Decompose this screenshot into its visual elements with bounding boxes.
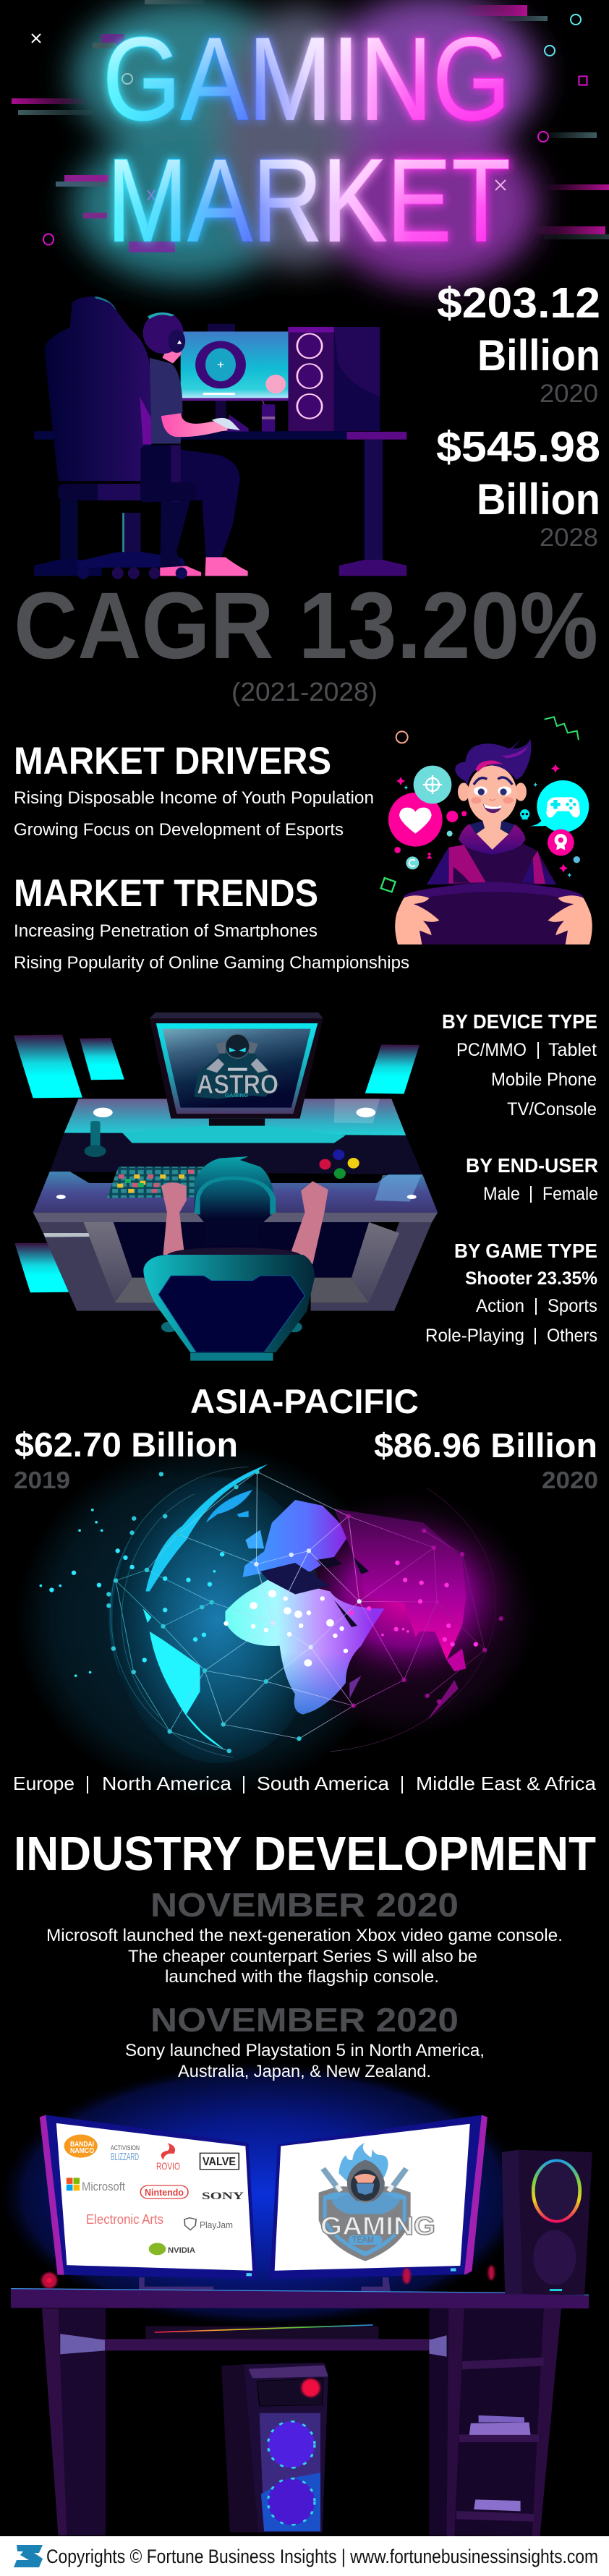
segment: end-user (466, 1154, 598, 1204)
coin icon (406, 856, 419, 869)
development: Sony (125, 2001, 485, 2081)
boy hair (455, 739, 531, 786)
Asia-Pacific 2019 value: 2019 (14, 1467, 70, 1493)
floating shapes (381, 717, 580, 892)
market size 2028 (436, 423, 600, 552)
decorative bars and shapes (12, 0, 609, 252)
illustration: dual monitor gaming desk (0, 2060, 592, 2536)
desk surface (33, 1099, 438, 1222)
segment: device type: PC/MMO (456, 1040, 527, 1060)
market size 2028: 2028 (540, 524, 598, 552)
bookshelf right (456, 2358, 544, 2522)
boy ears and face (458, 765, 527, 823)
boy neck and collar (459, 817, 526, 855)
network mesh (111, 1467, 496, 1757)
partner logo names: SONY (202, 2191, 244, 2202)
CAGR: (2021-2028) (231, 677, 378, 707)
title text: GAMING (103, 12, 511, 145)
segment: device type: Tablet (548, 1040, 597, 1060)
monitor (150, 1012, 323, 1126)
glowing city lights left (40, 1509, 224, 1677)
segment: end-user: Male (483, 1184, 520, 1204)
partner logos artwork (64, 2134, 239, 2255)
bubble: gamepad (529, 780, 589, 832)
under-desk shelf and RGB strip (60, 2325, 447, 2357)
Asia-Pacific 2019 value: $62.70 Billion (14, 1425, 238, 1464)
bubble: target (414, 766, 451, 803)
partner logo names (70, 2141, 244, 2255)
desk (34, 431, 406, 576)
segment: game type: Sports (548, 1296, 597, 1316)
network nodes (106, 1470, 302, 1753)
development: Sony: Australia, Japan, & New Zealand. (178, 2062, 431, 2081)
illustration: network globe (15, 1443, 538, 1797)
other regions: South America (257, 1773, 390, 1794)
pc tower with rings (288, 327, 380, 431)
segment: game type: Others (547, 1326, 597, 1346)
segment: device type (442, 1010, 597, 1119)
segment: game type (425, 1240, 597, 1346)
development: Sony: Sony launched Playstation 5 in North America, (125, 2041, 485, 2060)
handheld console and hands (395, 882, 592, 944)
segment: game type: BY GAME TYPE (454, 1240, 597, 1262)
market trends: Increasing Penetration of Smartphones (14, 921, 318, 941)
market size 2020 (437, 279, 600, 408)
footer bar (0, 2536, 609, 2576)
partner logo names: NVIDIA (168, 2246, 195, 2255)
blue glow (0, 2060, 532, 2329)
left monitor (40, 2115, 256, 2279)
segment: end-user: BY END-USER (466, 1154, 598, 1177)
joystick (85, 1121, 106, 1157)
market drivers: MARKET DRIVERS (14, 740, 331, 782)
hero title: GAMING MARKET neon (12, 0, 609, 286)
partner logo names: VALVE (203, 2156, 236, 2168)
title text: MARKET (107, 134, 511, 266)
bubble: medal (548, 829, 574, 856)
market size 2020: $203.12 (437, 279, 600, 327)
pc tower under desk (221, 2363, 328, 2532)
title blur halo: MARKET (107, 134, 511, 266)
partner logo names: BLIZZARD (111, 2151, 139, 2163)
Astro Gaming logo on monitor: ASTRO (197, 1070, 278, 1099)
illustration: gamer at desk back view (14, 1012, 438, 1361)
market size 2020: 2020 (540, 380, 598, 408)
player head with headset (194, 1156, 276, 1245)
partner logo names: Electronic Arts (86, 2212, 163, 2227)
market drivers (14, 740, 374, 840)
mesh nodes centre (254, 1548, 362, 1650)
wall panels (14, 1035, 420, 1292)
gaming team emblem: GAMING (320, 2212, 435, 2240)
other regions (13, 1773, 597, 1794)
continents (143, 1464, 466, 1750)
other regions: Middle East & Africa (416, 1773, 597, 1794)
Asia-Pacific 2020 value: $86.96 Billion (374, 1426, 597, 1464)
red indicator lights (41, 2266, 495, 2288)
drink can (262, 401, 275, 432)
partner logo names: ACTIVISION (111, 2144, 140, 2151)
boy hoodie (427, 844, 556, 884)
other regions: Europe (13, 1773, 74, 1794)
partner logo names: ROVIO (156, 2160, 180, 2172)
globe body (108, 1477, 521, 1763)
desk top (11, 2289, 589, 2308)
gamer figure (140, 312, 249, 579)
market trends: Rising Popularity of Online Gaming Championships (14, 953, 409, 973)
Asia-Pacific 2020 value (374, 1426, 598, 1493)
title text (103, 12, 511, 266)
segment: device type: TV/Console (507, 1099, 597, 1119)
speaker tower right (502, 2150, 592, 2295)
development: Microsoft: The cheaper counterpart Series S will also be (128, 1947, 477, 1966)
monitor (181, 324, 289, 431)
gaming chair back view (143, 1248, 315, 1361)
segment: game type: Action (476, 1296, 524, 1316)
market trends: MARKET TRENDS (14, 872, 318, 915)
Astro Gaming logo on monitor: GAMING (225, 1093, 249, 1099)
Astro Gaming logo on monitor (194, 1033, 279, 1099)
lights (56, 1108, 417, 1199)
market size 2028: $545.98 (436, 423, 600, 471)
title text: GAMING (103, 12, 511, 145)
partner logo names: NAMCO (70, 2147, 94, 2155)
other regions: North America (102, 1773, 232, 1794)
footer logo (14, 2545, 43, 2567)
market trends (14, 872, 409, 973)
Asia-Pacific 2019 value (14, 1425, 238, 1493)
partner logo names: BANDAI (70, 2141, 94, 2149)
segment: device type: Mobile Phone (491, 1070, 597, 1090)
development: Microsoft: NOVEMBER 2020 (150, 1886, 459, 1924)
segment: end-user: Female (542, 1184, 598, 1204)
segment: game type: Shooter 23.35% (465, 1268, 597, 1289)
regional heading: Asia-Pacific: ASIA-PACIFIC (190, 1382, 419, 1420)
gaming team emblem: TEAM (352, 2235, 374, 2245)
glowing city lights africa (223, 1590, 348, 1666)
player arms and hands (161, 1181, 328, 1264)
Asia-Pacific 2020 value: 2020 (542, 1467, 598, 1493)
partner logo names: Microsoft (82, 2180, 125, 2193)
gaming chair (34, 297, 198, 579)
mesh nodes right (346, 1514, 503, 1708)
glowing city lights asia (349, 1561, 478, 1647)
keyboard (107, 1167, 210, 1198)
title text: MARKET (107, 134, 511, 266)
desk legs (38, 1222, 432, 1311)
gaming team emblem (319, 2143, 435, 2261)
segment: game type: Role-Playing (425, 1326, 524, 1346)
desk legs (42, 2308, 561, 2536)
arcade buttons (319, 1149, 359, 1179)
skull icon (520, 809, 529, 819)
partner logo names: PlayJam (200, 2219, 233, 2230)
market drivers: Growing Focus on Development of Esports (14, 820, 344, 840)
title blur halo (103, 12, 511, 266)
development: Microsoft: launched with the flagship console. (165, 1967, 439, 1987)
development: Microsoft (46, 1886, 563, 1987)
segment: device type: BY DEVICE TYPE (442, 1010, 597, 1033)
market size 2028: Billion (477, 475, 600, 524)
illustration: boy with handheld console (381, 717, 592, 944)
title glow (72, 0, 539, 286)
bubble: heart (388, 793, 443, 847)
partner logo names: Nintendo (145, 2187, 184, 2198)
monitor stands (139, 2277, 391, 2291)
title blur halo: GAMING (103, 12, 511, 145)
development: Sony: NOVEMBER 2020 (150, 2001, 459, 2039)
market size 2020: Billion (477, 331, 600, 380)
illustration: gamer at desk side view (34, 297, 406, 579)
right monitor (270, 2115, 487, 2279)
development: Microsoft: Microsoft launched the next-generation Xbox video game console. (46, 1926, 563, 1945)
market drivers: Rising Disposable Income of Youth Population (14, 788, 374, 808)
globe halo (15, 1443, 538, 1797)
